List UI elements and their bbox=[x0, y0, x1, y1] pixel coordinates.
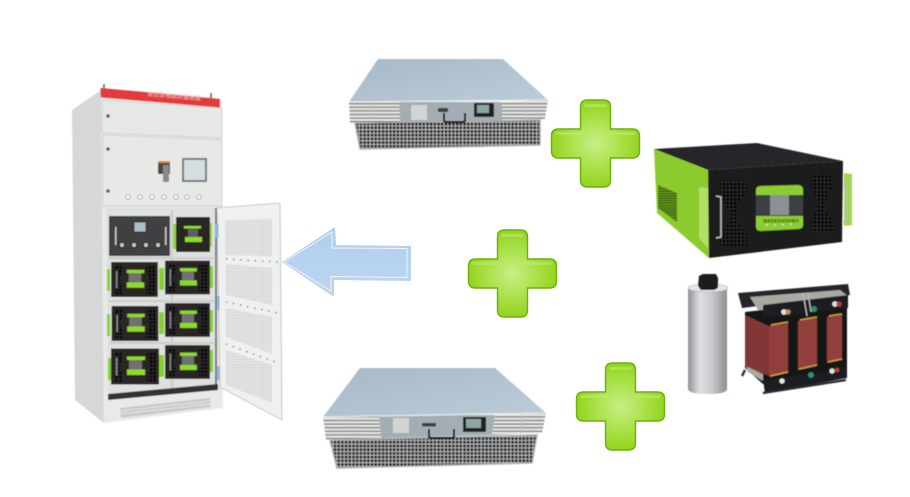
rotary switch bbox=[158, 161, 170, 182]
rating label bbox=[393, 418, 409, 433]
instrument panel bbox=[103, 114, 222, 206]
front panel bbox=[379, 415, 495, 438]
terminals bbox=[781, 293, 842, 316]
power module top right bbox=[173, 217, 212, 252]
connector bbox=[438, 108, 448, 112]
icon: capacitor bbox=[688, 274, 728, 394]
cabinet side bbox=[72, 90, 104, 423]
cabinet front bbox=[101, 90, 223, 423]
open interior bbox=[106, 208, 218, 400]
icon: reactor bbox=[738, 284, 850, 393]
top control module bbox=[109, 216, 170, 256]
side vent bbox=[658, 185, 677, 222]
panel: cabinet bbox=[72, 84, 282, 423]
unit top face bbox=[323, 368, 546, 417]
display bbox=[463, 417, 486, 432]
handle bbox=[429, 429, 454, 438]
plinth bbox=[108, 384, 218, 418]
panel: green power module bbox=[654, 143, 852, 258]
front top plate bbox=[763, 295, 848, 318]
green display bezel bbox=[756, 185, 803, 231]
top face bbox=[654, 143, 843, 170]
display bbox=[474, 103, 494, 117]
handle bbox=[444, 113, 465, 122]
mesh grille bbox=[330, 435, 537, 468]
louvres bbox=[349, 100, 548, 123]
dark core bbox=[745, 300, 847, 384]
green side bbox=[654, 149, 709, 258]
left flange bbox=[699, 187, 708, 248]
arrow: into cabinet bbox=[282, 227, 411, 297]
header text: 全控型电能质量装置 bbox=[147, 90, 201, 102]
lower terminals bbox=[779, 368, 839, 384]
coil clamps bbox=[770, 314, 842, 376]
connector bbox=[422, 423, 436, 426]
touch display bbox=[182, 158, 207, 182]
capacitor body bbox=[688, 288, 727, 394]
power modules bbox=[107, 261, 213, 384]
top plate bbox=[738, 284, 850, 308]
right flange bbox=[844, 173, 852, 226]
icon: plus centre bbox=[468, 230, 556, 317]
louvres bbox=[323, 413, 546, 440]
panel: bottom rack unit bbox=[323, 368, 546, 468]
coil windings bbox=[745, 315, 842, 376]
capacitor lid bbox=[688, 284, 728, 292]
icon: plus top bbox=[552, 100, 640, 187]
vents bbox=[720, 173, 834, 246]
icon: plus bottom bbox=[576, 363, 664, 450]
red header band bbox=[100, 88, 220, 108]
open door bbox=[217, 203, 282, 420]
grey yoke bbox=[750, 290, 848, 318]
upper door panel bbox=[102, 100, 222, 138]
feet bbox=[742, 370, 846, 393]
handles bbox=[716, 184, 847, 238]
black front bbox=[708, 161, 843, 258]
bottom plate bbox=[763, 368, 847, 393]
panel: top rack unit bbox=[349, 59, 548, 149]
unit top face bbox=[349, 59, 548, 102]
mesh grille bbox=[355, 120, 540, 149]
front panel bbox=[399, 102, 502, 122]
rating label bbox=[411, 105, 427, 120]
green display bezel: 谐波智能滤波控制模块 bbox=[763, 218, 799, 223]
top pins bbox=[104, 84, 211, 99]
lower yoke bbox=[746, 366, 763, 381]
indicator buttons bbox=[126, 195, 201, 199]
terminal block bbox=[698, 274, 718, 290]
